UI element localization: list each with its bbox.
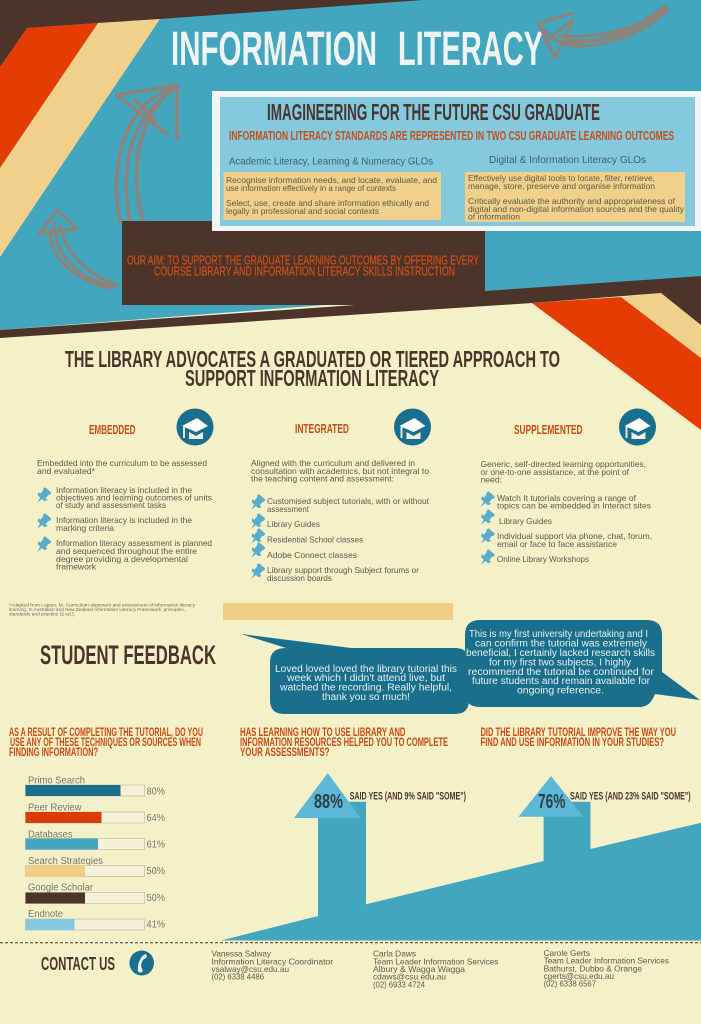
intro text: the teaching content and assessment: [251, 474, 394, 484]
list item: Library Guides [267, 519, 320, 529]
panel: aim banner [122, 221, 485, 305]
list item: Individual support via phone, chat, forum, [497, 531, 652, 541]
panel: supplemented [476, 408, 656, 569]
bar: peer review: 64% [146, 812, 165, 824]
list item [497, 493, 651, 510]
list item [267, 496, 430, 514]
bar: search strategies [26, 855, 165, 877]
icon: pin [247, 512, 267, 533]
bottom-right retro stripes [0, 276, 701, 430]
contact: Vanessa Salway: Vanessa Salway [212, 949, 272, 959]
list item: marking criteria [56, 523, 114, 533]
contact: Carole Gerts: cgerts@csu.edu.au [544, 971, 614, 981]
list item: Online Library Workshops [497, 554, 589, 564]
bar: endnote: 41% [146, 918, 165, 930]
speech bubble: left quote [241, 634, 469, 714]
contact: Carla Daws: Team Leader Information Services [373, 956, 498, 966]
bar: endnote [26, 908, 165, 930]
bar: search strategies: 50% [146, 865, 165, 877]
aim text: OUR AIM: TO SUPPORT THE GRADUATE LEARNING OUTCOMES BY OFFERING EVERY [127, 252, 479, 268]
tan box: academic outcomes: use information effectively in a range of contexts [226, 183, 396, 193]
icon: graduation cap [619, 408, 656, 446]
intro text [480, 459, 646, 484]
heading: supplemented: SUPPLEMENTED [514, 422, 582, 437]
heading: embedded: EMBEDDED [89, 422, 136, 437]
title: INFORMATION [171, 23, 377, 76]
arrow: middle sketch [116, 85, 177, 222]
speech bubble: right quote: beneficial, I certainly lacked research skills [466, 648, 655, 659]
bar: primo search: Primo Search [28, 775, 85, 787]
icon: pin [247, 527, 267, 548]
footnote: *Adapted from Lupton, M. Curriculum alignment and assessment of information literacy [9, 602, 196, 608]
list item: Watch It tutorials covering a range of [497, 493, 637, 503]
bar: databases: 61% [146, 838, 165, 850]
list item: and sequenced throughout the entire [56, 546, 197, 556]
bar: primo search [26, 775, 165, 797]
tan box: academic outcomes: Select, use, create and share information ethically and [226, 198, 429, 208]
arrow head: 88 percent stat [294, 773, 466, 818]
bar: peer review [26, 802, 165, 824]
tan box: academic outcomes [224, 172, 441, 220]
contact: Carole Gerts [544, 948, 669, 989]
speech bubble: right quote: This is my first university undertaking and I [469, 629, 648, 640]
contact: Carole Gerts: Team Leader Information Services [544, 956, 669, 966]
list item [267, 565, 419, 583]
list item: Residential School classes [267, 534, 363, 544]
speech bubble: right quote: ongoing reference. [517, 686, 604, 696]
list item [497, 531, 652, 549]
arrow head: 88 percent stat: SAID YES (AND 9% SAID "SOME") [350, 790, 466, 802]
icon: pin [247, 493, 267, 514]
question: techniques and sources [9, 725, 203, 759]
arrow: top right sketch [538, 6, 668, 58]
title: LITERACY [398, 23, 543, 76]
list item: email or face to face assistance [497, 539, 617, 549]
list item: objectives and learning outcomes of units [56, 492, 212, 502]
speech bubble: right quote: can confirm the tutorial was extremely [475, 638, 647, 650]
section heading: tiered approach: SUPPORT INFORMATION LITERACY [185, 365, 439, 391]
intro text: Embedded into the curriculum to be assessed [37, 458, 207, 468]
list item: Library support through Subject forums or [267, 565, 419, 575]
icon: pin [476, 490, 496, 511]
question: assessments [240, 725, 448, 759]
question: assessments: INFORMATION RESOURCES HELPED YOU TO COMPLETE [240, 735, 448, 749]
bar: search strategies: Search Strategies [28, 855, 103, 867]
bar: databases: Databases [28, 828, 72, 840]
arrow head: 76 percent stat: 76% [538, 791, 566, 813]
panel: embedded [33, 408, 213, 572]
intro text [251, 458, 429, 484]
tan box: digital outcomes: of information [468, 212, 520, 222]
bar: google scholar: Google Scholar [28, 882, 93, 894]
top-left retro stripes [0, 0, 423, 257]
speech bubble: right quote: for my first two subjects, I highly [489, 658, 631, 668]
icon: pin [476, 527, 496, 548]
panel: integrated [247, 408, 431, 583]
contact: Vanessa Salway: vsalway@csu.edu.au [212, 964, 289, 974]
list item: Information literacy is included in the [56, 515, 192, 525]
heading: integrated: INTEGRATED [295, 421, 349, 436]
contact: Vanessa Salway [212, 949, 333, 982]
list item: Adobe Connect classes [267, 550, 357, 560]
intro text: Aligned with the curriculum and delivered in [251, 458, 415, 468]
speech bubble: right quote: future students and remain available for [472, 676, 651, 687]
icon: pin [476, 508, 496, 529]
footnote: learning. In Australian and New Zealand Information Literacy Framework, principles, [9, 607, 185, 612]
heading: student feedback: STUDENT FEEDBACK [40, 640, 216, 670]
tan box: digital outcomes: Critically evaluate the authority and appropriateness of [468, 196, 676, 206]
icon: graduation cap [176, 408, 214, 446]
list item: Information literacy assessment is planned [56, 538, 212, 548]
question: studies [480, 725, 676, 749]
intro text: and evaluated* [37, 466, 96, 476]
list item [56, 515, 192, 533]
list item: Customised subject tutorials, with or without [267, 496, 430, 506]
tan box: digital outcomes: manage, store, preserve and organise information [468, 181, 655, 191]
list item: of study and assessment tasks [56, 500, 166, 510]
contact: Carla Daws: Carla Daws [373, 949, 416, 959]
tan divider bar [223, 603, 453, 620]
icon: pin [33, 535, 53, 556]
arrow: lower left sketch [39, 210, 117, 288]
speech bubble: left quote: Loved loved loved the library tutorial this [275, 664, 457, 675]
question: assessments: HAS LEARNING HOW TO USE LIBRARY AND [240, 725, 406, 739]
contact: Carla Daws [373, 949, 498, 989]
contact: Carole Gerts: Carole Gerts [544, 948, 590, 958]
contact: Carole Gerts: (02) 6338 6567 [544, 979, 596, 989]
speech bubble: left quote: thank you so much! [322, 692, 410, 703]
rising teal arrows chart [221, 802, 701, 940]
tan box: digital outcomes [465, 172, 685, 222]
intro text: Generic, self-directed learning opportunities, [480, 459, 646, 469]
bar: primo search: 80% [146, 785, 165, 797]
question: techniques and sources: USE ANY OF THESE TECHNIQUES OR SOURCES WHEN [10, 735, 201, 749]
bar: google scholar: 50% [146, 892, 165, 904]
footnote: standards and practice (2 ed.). [9, 612, 75, 616]
arrow head: 88 percent stat: 88% [314, 791, 343, 813]
footnote [9, 602, 196, 616]
speech bubble: left quote: watched the recording. Really helpful, [279, 682, 452, 694]
tan box: digital outcomes: digital and non-digital information sources and the quality [468, 204, 685, 214]
section heading: tiered approach [65, 346, 560, 391]
list item [56, 538, 212, 572]
bar chart: tools used [26, 775, 165, 930]
bar: google scholar [26, 882, 165, 904]
list item: discussion boards [267, 573, 332, 583]
list item: topics can be embedded in Interact sites [497, 500, 651, 510]
icon: phone [129, 950, 154, 976]
icon: pin [33, 486, 53, 507]
contact: Carla Daws: (02) 6933 4724 [373, 979, 425, 989]
tan box: academic outcomes: Recognise information needs, and locate, evaluate, and [226, 175, 437, 185]
list item: Library Guides [499, 516, 552, 526]
list item [56, 485, 212, 510]
intro text [37, 458, 207, 476]
aim text [127, 252, 479, 278]
header teal panel [0, 0, 701, 330]
speech bubble: right quote: recommend the tutorial be continued for [468, 667, 655, 678]
tan box: academic outcomes: legally in professional and social contexts [226, 206, 379, 216]
contact: Vanessa Salway: (02) 6338 4486 [212, 972, 264, 982]
icon: graduation cap [394, 408, 431, 446]
bar: databases [26, 828, 165, 850]
column label: academic literacy: Academic Literacy, Learning & Numeracy GLOs [229, 156, 433, 168]
intro text: need: [480, 474, 502, 484]
list item: assessment [267, 504, 310, 514]
icon: pin [247, 562, 267, 583]
contact: Carla Daws: cdaws@csu.edu.au [373, 972, 446, 982]
intro text: or one-to-one assistance, at the point of [480, 467, 630, 477]
arrow head: 76 percent stat [518, 776, 691, 817]
icon: pin [247, 541, 267, 562]
speech bubble: left quote: week which I didn't attend live, but [286, 673, 445, 684]
list item: degree providing a developmental [56, 554, 188, 564]
question: techniques and sources: FINDING INFORMATION? [9, 745, 98, 759]
bar: endnote: Endnote [28, 908, 63, 920]
column label: digital literacy: Digital & Information Literacy GLOs [489, 155, 646, 166]
panel: graduate learning outcomes [212, 91, 701, 231]
speech bubble: right quote [465, 620, 700, 707]
aim text: COURSE LIBRARY AND INFORMATION LITERACY SKILLS INSTRUCTION [154, 264, 455, 278]
contact: Carla Daws: Albury & Wagga Wagga [373, 964, 465, 974]
list item: Information literacy is included in the [56, 485, 192, 495]
question: assessments: YOUR ASSESSMENTS? [240, 745, 330, 759]
icon: pin [476, 548, 496, 569]
intro text: consultation with academics, but not integral to [251, 466, 429, 476]
heading: contact us: CONTACT US [41, 954, 115, 974]
tan box: digital outcomes: Effectively use digital tools to locate, filter, retrieve, [468, 173, 655, 183]
list item: framework [56, 562, 97, 572]
question: techniques and sources: AS A RESULT OF COMPLETING THE TUTORIAL, DO YOU [9, 725, 203, 739]
contact: Vanessa Salway: Information Literacy Coordinator [212, 956, 333, 966]
icon: pin [33, 512, 53, 533]
contact: Carole Gerts: Bathurst, Dubbo & Orange [544, 963, 642, 973]
bar: peer review: Peer Review [28, 802, 82, 814]
